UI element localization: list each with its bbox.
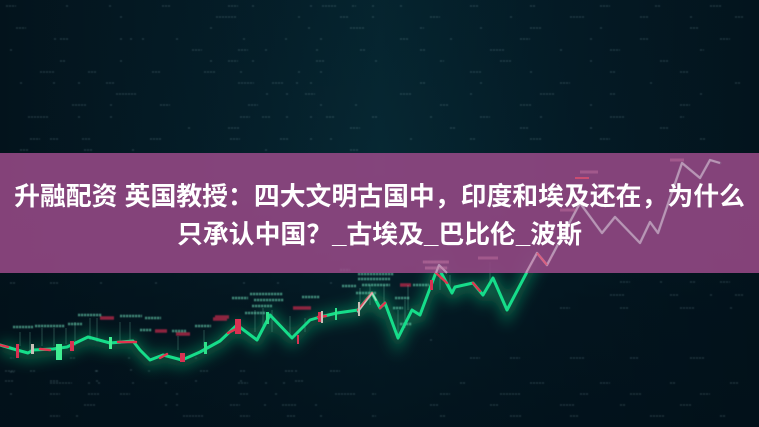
thin vertical ticks under labels: [20, 262, 490, 350]
title: [14, 182, 745, 249]
candle bodies: [16, 280, 433, 362]
title line 1: 升融配资 英国教授：四大文明古国中，印度和埃及还在，为什么: [14, 183, 745, 211]
small data labels above the line: [13, 262, 449, 334]
title line 2: 只承认中国？_古埃及_巴比伦_波斯: [177, 221, 582, 249]
glow beneath the price line: [0, 255, 537, 362]
price line: green and red candles: [0, 160, 720, 360]
title band: [0, 153, 759, 273]
